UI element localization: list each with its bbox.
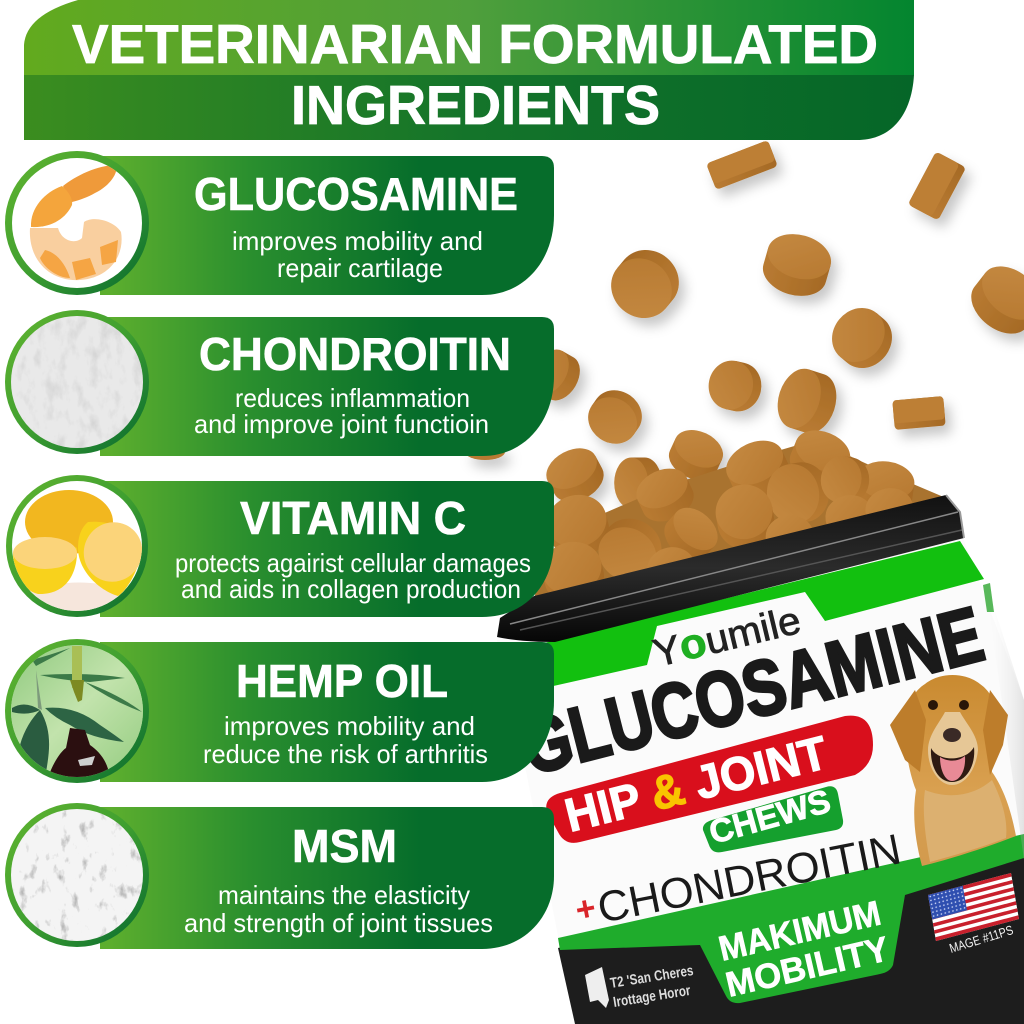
chondroitin label: + <box>572 889 599 930</box>
flying chews <box>465 140 1024 510</box>
panel: glucosamine <box>5 151 554 295</box>
description: improves mobility and <box>224 711 475 741</box>
hip and joint badge: HIP & JOINT <box>560 725 833 842</box>
jar top green band <box>540 541 984 689</box>
maximum mobility text: MAKIMUM <box>715 894 885 969</box>
description <box>203 711 488 769</box>
icon: white dog silhouette <box>585 967 609 1008</box>
description: and improve joint functioin <box>194 409 489 439</box>
heading: MSM <box>292 820 397 872</box>
jar small print: Irottage Horor <box>612 983 692 1011</box>
jar body <box>497 538 1024 1024</box>
heading: HEMP OIL <box>236 655 448 707</box>
description: and strength of joint tissues <box>184 908 493 938</box>
product jar <box>497 495 1024 1024</box>
jar green side mark <box>983 583 994 612</box>
description: maintains the elasticity <box>218 880 470 910</box>
icon: hemp leaves and oil bottle <box>10 644 144 778</box>
maximum mobility text: MOBILITY <box>722 929 893 1005</box>
description: reduces inflammation <box>235 383 470 413</box>
jar small print <box>609 963 695 1011</box>
title line 1: VETERINARIAN FORMULATED <box>72 13 878 75</box>
description <box>175 548 531 604</box>
panel: chondroitin <box>5 310 554 456</box>
jar lower green label <box>558 834 1024 1003</box>
description: repair cartilage <box>277 253 443 283</box>
icon: msm powder <box>10 808 144 942</box>
jar lower black band <box>558 842 1024 1024</box>
golden retriever <box>890 675 1016 866</box>
jar right edge shading <box>985 580 1024 860</box>
panel: vitamin c <box>6 475 554 617</box>
heading: GLUCOSAMINE <box>194 168 518 220</box>
description: improves mobility and <box>232 226 483 256</box>
header banner <box>24 0 914 140</box>
panel: msm <box>5 803 554 949</box>
chondroitin label: CHONDROITIN <box>594 825 905 933</box>
title line 2: INGREDIENTS <box>291 74 660 136</box>
icon: shrimp <box>30 165 122 280</box>
icon: lemons <box>13 490 142 611</box>
description <box>194 383 489 439</box>
dog mouth <box>931 747 974 782</box>
description: and aids in collagen production <box>181 574 521 604</box>
brand logo: Youmile <box>648 595 805 676</box>
chew pile in jar <box>530 423 946 625</box>
description: reduce the risk of arthritis <box>203 739 488 769</box>
dog nose <box>943 728 961 742</box>
maximum mobility text <box>715 894 893 1005</box>
jar small print: T2 'San Cheres <box>609 963 695 992</box>
dog eyes <box>928 700 938 710</box>
dog ears <box>890 690 1008 775</box>
dog chest <box>924 780 1006 862</box>
american flag <box>928 873 1019 941</box>
icon: white powder <box>10 315 144 449</box>
description: protects agairist cellular damages <box>175 548 531 578</box>
heading: CHONDROITIN <box>199 328 511 380</box>
dog muzzle <box>928 712 978 785</box>
jar rim <box>497 495 964 642</box>
chews badge: CHEWS <box>705 782 834 851</box>
description <box>184 880 493 938</box>
panel: hemp oil <box>5 639 554 783</box>
description <box>232 226 483 283</box>
heading: VITAMIN C <box>240 492 466 544</box>
dog tongue <box>940 756 965 781</box>
